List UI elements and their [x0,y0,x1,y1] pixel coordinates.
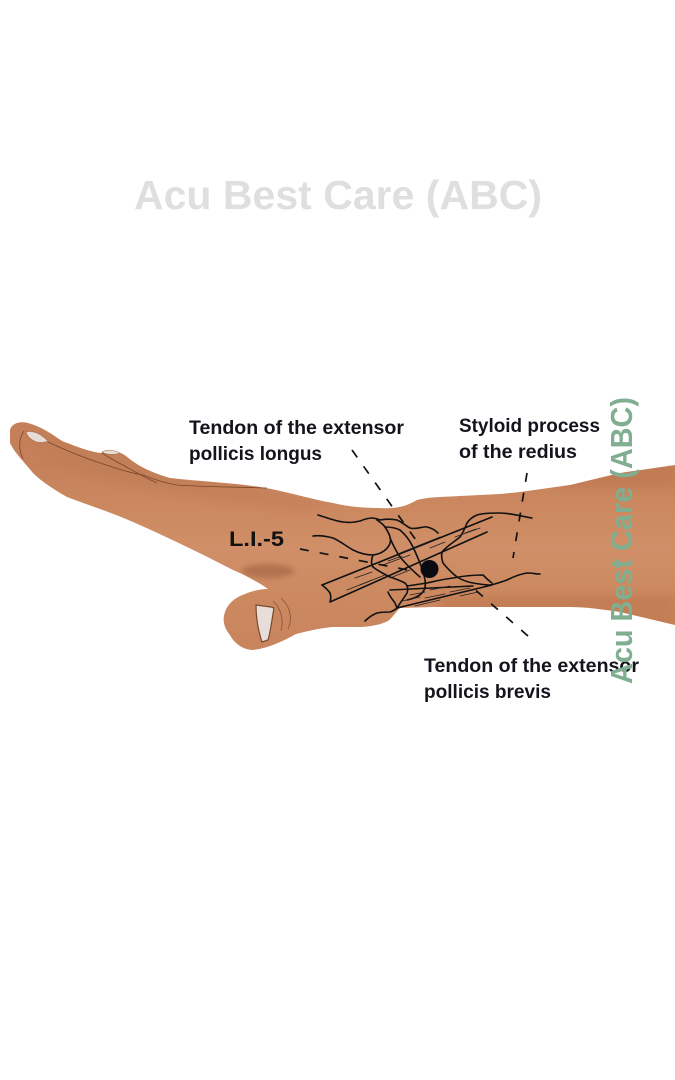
label: tendon brevis [424,656,640,703]
label: tendon longus: Tendon of the extensor [189,418,405,439]
tendon of longus [322,517,492,585]
label: tendon brevis: pollicis brevis [424,682,551,703]
thumb creases [273,598,290,631]
radial contour [442,513,532,585]
skin shading [125,466,674,642]
label: styloid process: of the redius [459,442,577,463]
label: styloid process: Styloid process [459,416,600,437]
label: tendon longus [189,418,405,465]
leader lines [300,450,528,636]
label: L.I.-5: L.I.-5 [229,528,284,551]
tendon of brevis [390,586,473,590]
leader: styloid [513,473,527,558]
acupuncture point L.I.-5 [420,560,438,578]
anatomy line drawing [313,513,540,621]
index fingernail [26,431,48,442]
title watermark: Acu Best Care (ABC) [134,172,542,218]
leader: brevis [472,587,528,636]
label: tendon longus: pollicis longus [189,444,322,465]
hand silhouette [10,422,675,650]
label: tendon brevis: Tendon of the extensor [424,656,640,677]
upper wrist contours [318,515,438,533]
label: styloid process [459,416,600,463]
hand illustration [10,422,675,650]
tendon hatching [347,528,480,606]
leader: longus [352,450,418,543]
vertical watermark: Acu Best Care (ABC) [604,397,639,684]
finger creases [20,431,267,488]
leader: L.I.-5 [300,549,413,571]
thumbnail [256,605,274,642]
middle fingernail [102,450,120,454]
